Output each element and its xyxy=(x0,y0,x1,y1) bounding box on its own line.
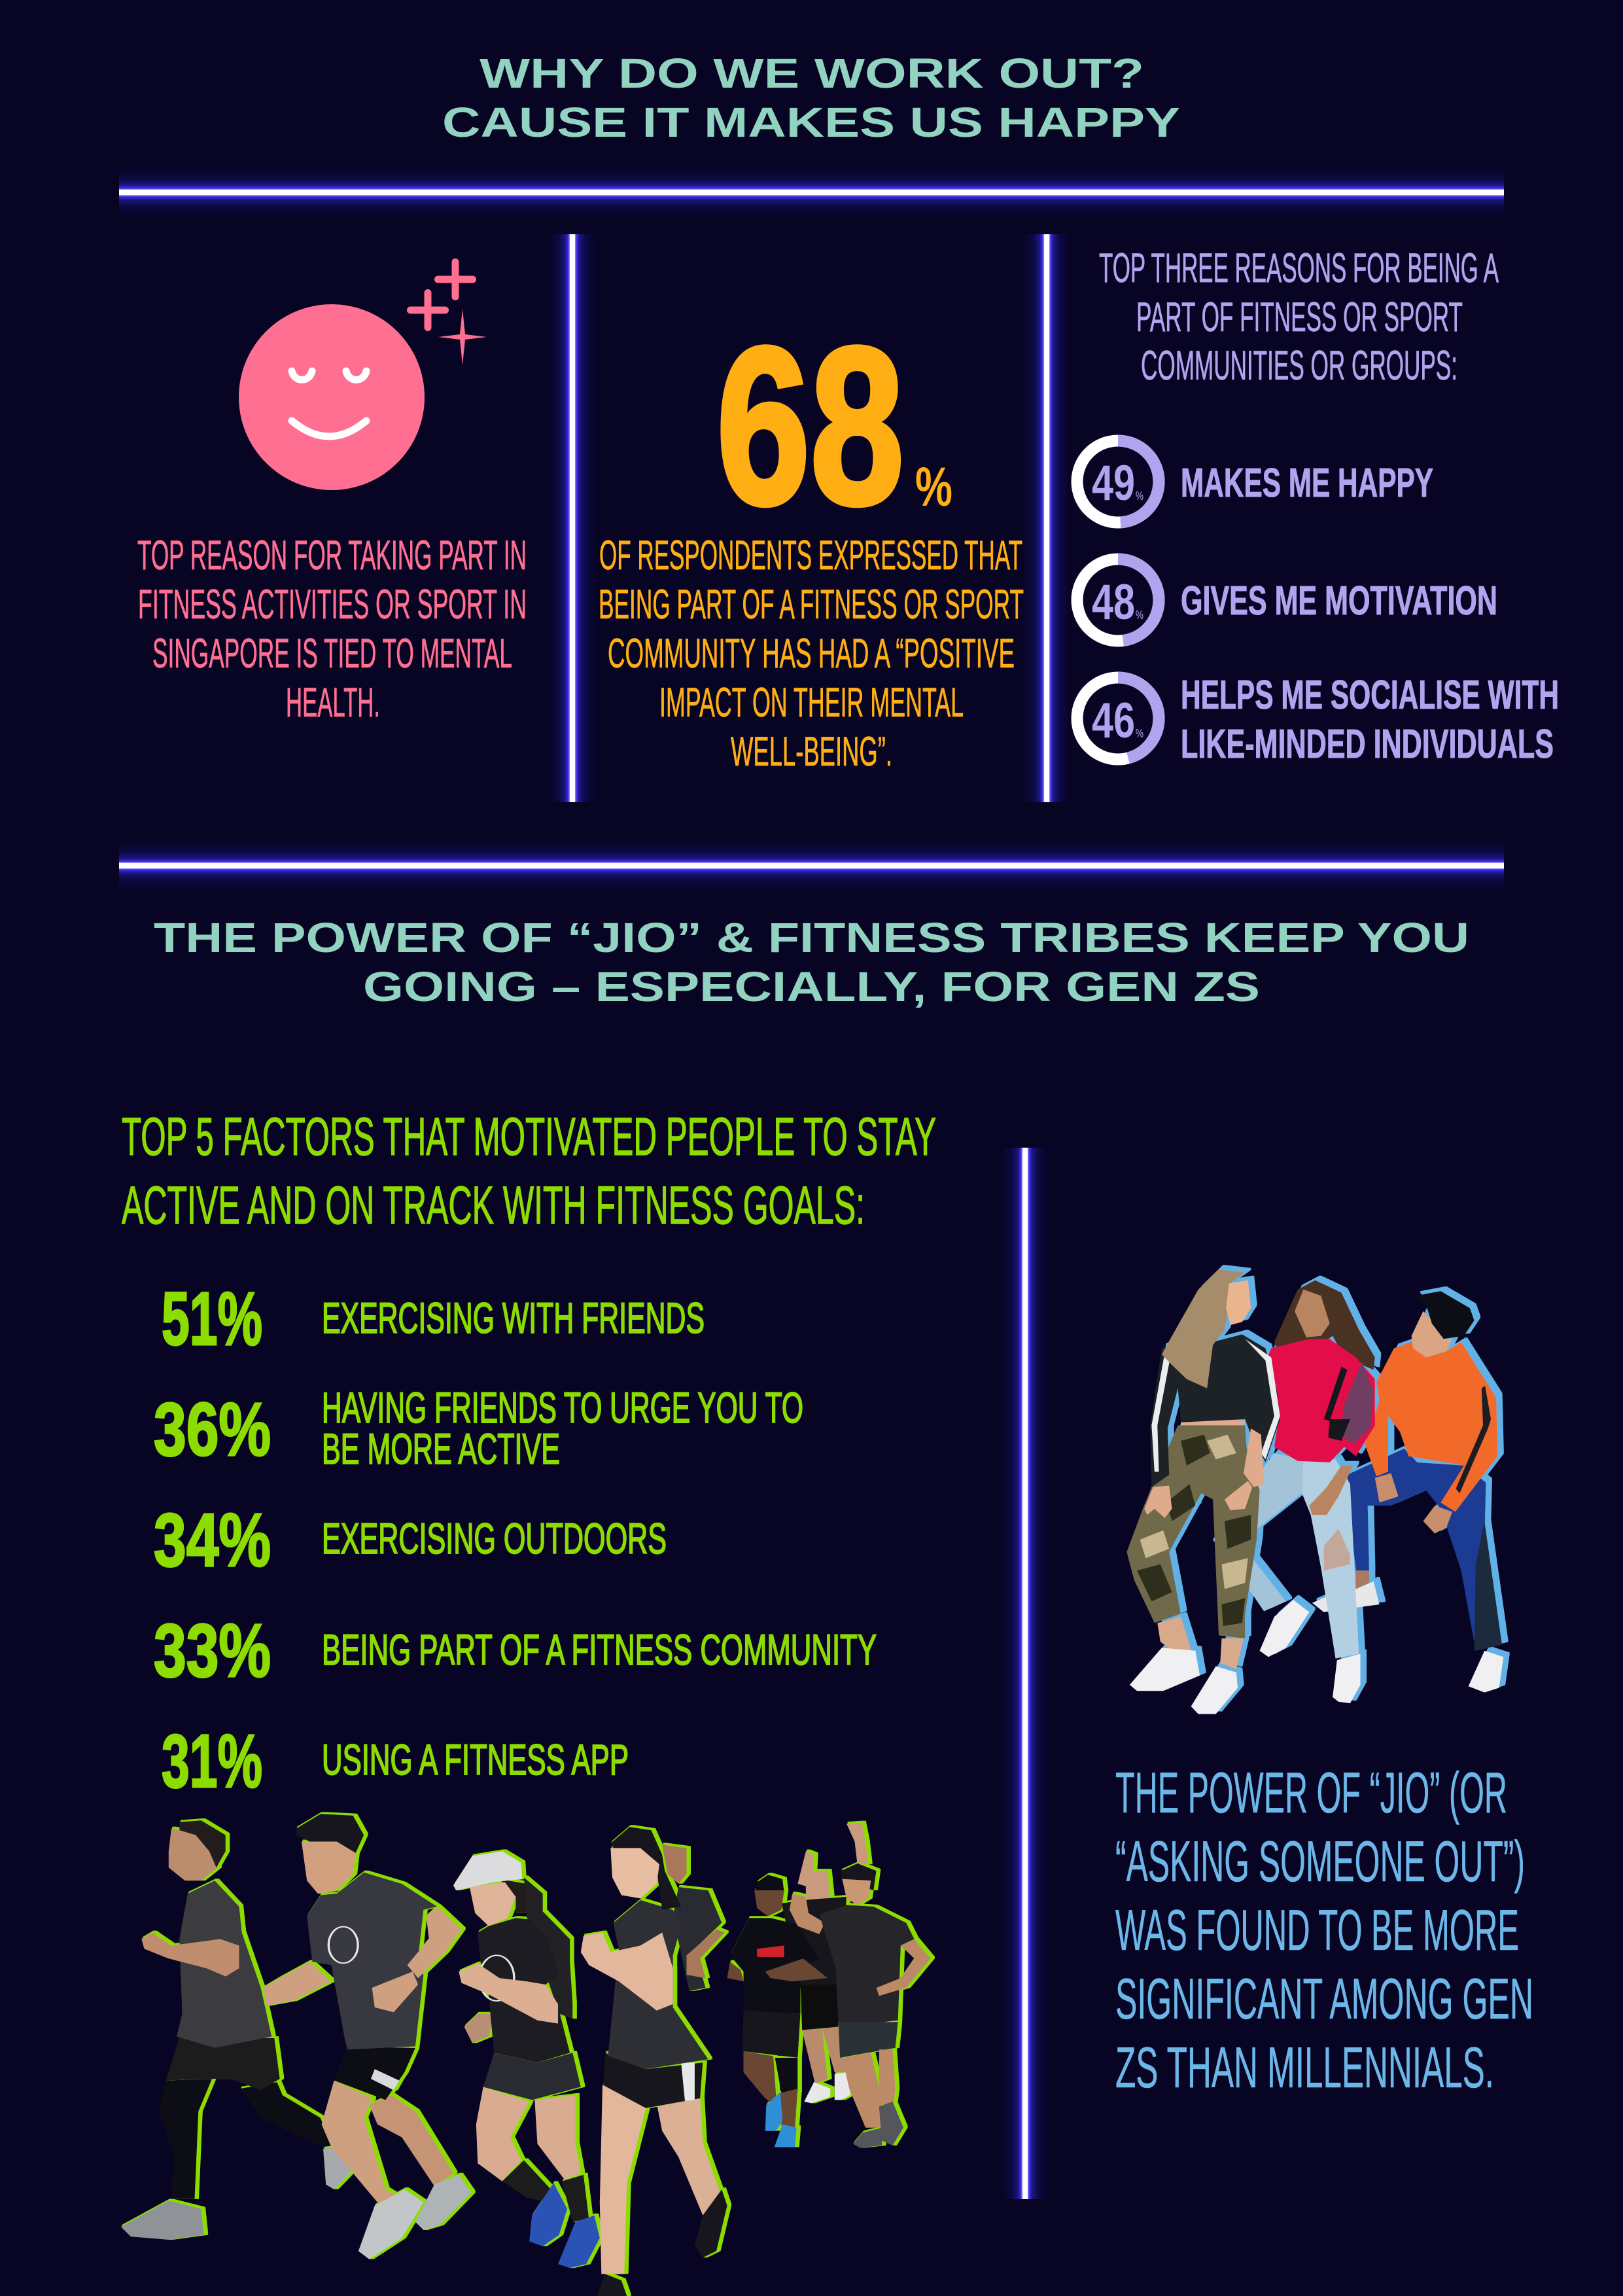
heading: top 5 factors: TOP 5 FACTORS THAT MOTIVATED PEOPLE TO STAY xyxy=(122,1107,936,1167)
factor: 51 percent xyxy=(162,1277,705,1361)
text: respondents: IMPACT ON THEIR MENTAL xyxy=(659,680,964,726)
neon divider: column one xyxy=(549,234,596,802)
title: why do we work out: CAUSE IT MAKES US HAPPY xyxy=(442,99,1180,146)
text: the power of jio explained xyxy=(1115,1760,1533,2100)
factor: 31 percent: USING A FITNESS APP xyxy=(322,1735,629,1784)
runner: back right group xyxy=(727,1823,931,2147)
panel: happy face and mental health reason xyxy=(137,262,527,726)
neon divider: lower column xyxy=(1002,1148,1049,2199)
text: top reason: SINGAPORE IS TIED TO MENTAL xyxy=(152,631,512,677)
text: top reason xyxy=(137,533,527,726)
person: woman in camo pants xyxy=(1126,1269,1280,1714)
heading: top 5 factors: ACTIVE AND ON TRACK WITH FITNESS GOALS: xyxy=(122,1176,865,1235)
runner: man with glasses xyxy=(121,1820,353,2240)
factor: 33 percent: BEING PART OF A FITNESS COMMUNITY xyxy=(322,1625,877,1674)
factor: 36 percent xyxy=(154,1383,803,1473)
neon divider: middle xyxy=(119,841,1504,890)
factor: 36 percent: 36% xyxy=(154,1388,271,1472)
panel: 68 percent statistic xyxy=(599,301,1024,775)
donut: 49 percent makes me happy: 49 xyxy=(1092,455,1135,511)
factor: 31 percent xyxy=(162,1720,629,1803)
runner: woman in white cap xyxy=(453,1851,600,2268)
text: top reason: FITNESS ACTIVITIES OR SPORT IN xyxy=(138,582,527,627)
runner: woman in cap rear companion xyxy=(524,1877,572,2019)
big number: 68%: 68 xyxy=(716,301,904,551)
factor: 33 percent xyxy=(154,1609,877,1693)
factor: 51 percent: 51% xyxy=(162,1277,262,1361)
heading: top 5 factors xyxy=(122,1107,936,1235)
heading: the power of jio: GOING – ESPECIALLY, FOR GEN ZS xyxy=(363,963,1260,1010)
title: why do we work out: WHY DO WE WORK OUT? xyxy=(480,50,1144,97)
factor: 31 percent: 31% xyxy=(162,1720,262,1803)
big number: 68%: % xyxy=(915,456,952,518)
factor: 51 percent: EXERCISING WITH FRIENDS xyxy=(322,1294,705,1342)
factor: 34 percent: EXERCISING OUTDOORS xyxy=(322,1514,667,1563)
person: man in orange hoodie xyxy=(1312,1291,1503,1693)
donut: 46 percent helps me socialise xyxy=(1077,673,1559,767)
illustration: group of runners xyxy=(121,1814,931,2296)
text: respondents: WELL-BEING”. xyxy=(731,729,892,775)
text: respondents: BEING PART OF A FITNESS OR SPORT xyxy=(599,582,1024,627)
text: respondents: OF RESPONDENTS EXPRESSED THAT xyxy=(599,533,1022,578)
illustration: three friends xyxy=(1126,1269,1503,1714)
factor: 36 percent: HAVING FRIENDS TO URGE YOU TO xyxy=(322,1383,803,1432)
text: respondents: COMMUNITY HAS HAD A “POSITIVE xyxy=(608,631,1015,677)
factor: 34 percent xyxy=(154,1498,667,1582)
title: why do we work out xyxy=(442,50,1180,146)
donut: 48 percent gives me motivation xyxy=(1077,559,1497,641)
donut: 46 percent helps me socialise: 46 xyxy=(1092,693,1135,749)
panel: top three reasons xyxy=(1077,245,1559,767)
text: top reason: HEALTH. xyxy=(286,680,380,726)
donut: 49 percent makes me happy xyxy=(1077,441,1433,522)
donut: 48 percent gives me motivation: 48 xyxy=(1092,574,1135,630)
factor: 36 percent: BE MORE ACTIVE xyxy=(322,1424,560,1473)
text: top reason: TOP REASON FOR TAKING PART IN xyxy=(137,533,527,578)
donut: 49 percent makes me happy: % xyxy=(1136,489,1143,503)
factor: 34 percent: 34% xyxy=(154,1498,271,1582)
runner: woman in front xyxy=(581,1827,727,2296)
heading: the power of jio: THE POWER OF “JIO” & FITNESS TRIBES KEEP YOU xyxy=(154,914,1469,961)
heading: the power of jio xyxy=(154,914,1469,1010)
neon divider: column two xyxy=(1023,234,1070,802)
donut: 49 percent makes me happy: MAKES ME HAPPY xyxy=(1181,461,1433,506)
neon divider: top xyxy=(119,168,1504,217)
factor: 33 percent: 33% xyxy=(154,1609,271,1693)
text: respondents xyxy=(599,533,1024,775)
person: woman in red top xyxy=(1213,1280,1375,1703)
icon: smiling face with sparkles xyxy=(239,262,487,490)
heading: top three reasons xyxy=(1099,245,1499,389)
runner: man in adidas shorts xyxy=(264,1814,471,2259)
runner: man behind woman xyxy=(662,1845,724,1991)
list: top 5 motivating factors xyxy=(154,1277,877,1803)
donut: 48 percent gives me motivation: % xyxy=(1136,609,1143,622)
donut: 46 percent helps me socialise: % xyxy=(1136,727,1143,740)
